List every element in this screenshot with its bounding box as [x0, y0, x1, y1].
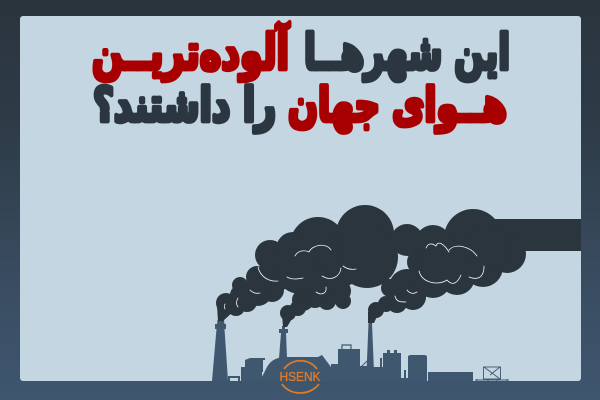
chimney 1: [212, 320, 228, 381]
title line 1: dark words: این شهرهــا: [304, 24, 510, 81]
scaffold: [475, 367, 509, 381]
base strip: [360, 367, 384, 381]
smoke clouds: [216, 205, 581, 327]
logo: HSENK: [280, 361, 321, 393]
smoke band to the right edge: [395, 219, 581, 251]
building 4: [408, 355, 427, 381]
chimney 3: [366, 323, 374, 372]
central mound: [256, 355, 352, 381]
plume 1: [260, 278, 284, 302]
title line 2: red words: هــوای جهان: [288, 78, 507, 133]
diagonal pipe: [360, 361, 367, 368]
title line 2: dark words: را داشتند؟: [93, 78, 276, 133]
plume 3: [389, 269, 425, 305]
building 3: [383, 350, 401, 381]
building 2: [331, 349, 367, 381]
building 2 roof pipe: [342, 345, 351, 349]
factory silhouette: [212, 320, 473, 381]
plume 2: [297, 265, 333, 301]
title: [92, 22, 510, 133]
building 1: [245, 358, 265, 381]
smoke highlights: [224, 243, 484, 309]
chimney 2: [279, 326, 288, 358]
title line 1: red words: آلوده‌تریــن: [92, 22, 290, 81]
smoke upper mass: [336, 205, 394, 263]
logo text: HSENK: [280, 370, 321, 384]
small structures left: [228, 376, 240, 381]
logo ring: [282, 361, 319, 393]
low building: [428, 372, 473, 381]
